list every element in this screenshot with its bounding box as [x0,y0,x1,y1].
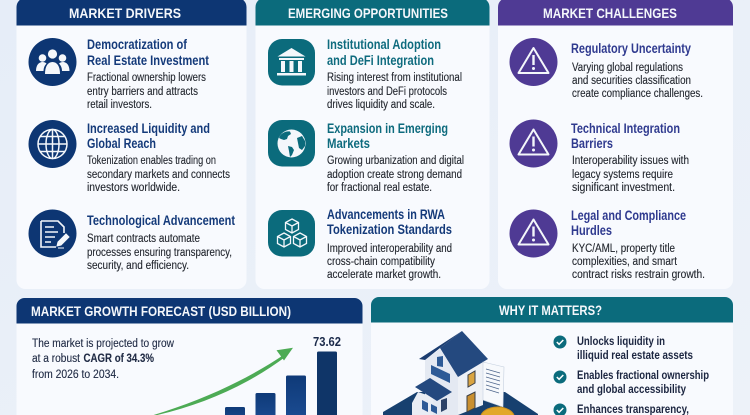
item: liquidity [87,121,230,194]
item: regulatory: create compliance challenges. [572,88,703,100]
check item 1: illiquid real estate assets [577,350,693,362]
panel: market challenges [498,0,733,289]
item: regulatory: and securities classification [572,75,691,87]
item: regulatory: Varying global regulations [572,62,683,74]
item: expansion: Growing urbanization and digital [327,155,464,167]
arrow: growth trend [152,348,293,415]
header: market growth forecast: MARKET GROWTH FORECAST (USD BILLION) [31,303,291,319]
header: market challenges: MARKET CHALLENGES [543,5,677,21]
panel: emerging opportunities [256,0,490,289]
item: rwa standards: accelerate market growth. [327,269,441,281]
item: technical: significant investment. [572,182,675,194]
bar chart [225,335,341,415]
item: expansion: for fractional real estate. [327,182,432,194]
text: cagr statement: at a robust [32,353,81,365]
item: technology: Technological Advancement [87,213,235,228]
check item 2 [554,370,709,396]
item: technical: Technical Integration [571,121,680,136]
check item 1: Unlocks liquidity in [577,336,665,348]
item: technology: Smart contracts automate [87,233,200,245]
header: market drivers: MARKET DRIVERS [69,5,181,21]
item: legal: complexities, and smart [572,256,678,268]
item: expansion: adoption create strong demand [327,169,462,181]
item: technical: Interoperability issues with [572,155,689,167]
item: liquidity: Global Reach [87,136,156,151]
item: technical: legacy systems require [572,169,673,181]
header: why it matters [371,297,733,322]
item: technology [87,213,235,272]
icon: institution [268,39,315,86]
item: legal [571,208,705,281]
check item 3 [554,404,689,415]
check item 2: and global accessibility [577,384,687,396]
item: democratization: Fractional ownership lowers [87,72,206,84]
item: technology: processes ensuring transparency, [87,247,232,259]
header: emerging opportunities: EMERGING OPPORTUNITIES [288,5,448,21]
item: democratization: Real Estate Investment [87,53,209,68]
icon: warning 2 [510,120,558,168]
item: legal: contract risks restrain growth. [572,269,705,281]
item: institutional adoption: drives liquidity and scale. [327,99,435,111]
item: technical [571,121,689,194]
item: legal: KYC/AML, property title [572,243,675,255]
bar chart: 73.62 [313,335,341,349]
item: institutional adoption: and DeFi Integration [327,53,434,68]
item: technology: security, and efficiency. [87,260,189,272]
illustration: tokenized house [383,331,538,415]
header: market growth forecast [16,298,362,324]
item: expansion [327,121,464,194]
item: rwa standards: Tokenization Standards [327,222,452,237]
panel: why it matters [371,297,733,415]
item: institutional adoption: investors and DeFi protocols [327,86,447,98]
item: rwa standards: cross-chain compatibility [327,256,435,268]
item: democratization: entry barriers and attracts [87,86,198,98]
item: democratization: retail investors. [87,99,152,111]
panel: market growth forecast [16,298,362,415]
item: expansion: Markets [327,136,370,151]
icon: cubes [268,210,315,256]
header: why it matters: WHY IT MATTERS? [499,302,602,318]
item: rwa standards: Improved interoperability and [327,243,452,255]
header: market challenges [498,0,733,26]
check item 2: Enables fractional ownership [577,370,709,382]
check item 1 [554,336,693,362]
panel: market drivers [16,0,246,289]
item: institutional adoption: Rising interest from institutional [327,72,462,84]
item: legal: Hurdles [571,223,612,238]
item: expansion: Expansion in Emerging [327,121,448,136]
icon: warning 1 [510,38,558,86]
item: democratization [87,37,209,111]
icon: warning 3 [510,210,558,258]
item: liquidity: Tokenization enables trading on [87,155,216,167]
item: institutional adoption [327,37,462,111]
item: liquidity: investors worldwide. [87,182,180,194]
text: cagr statement: from 2026 to 2034. [32,369,119,381]
item: regulatory [571,41,703,100]
item: institutional adoption: Institutional Adoption [327,37,441,52]
header: market drivers [16,0,246,26]
item: democratization: Democratization of [87,37,187,52]
item: regulatory: Regulatory Uncertainty [571,41,691,56]
item: technical: Barriers [571,136,613,151]
item: rwa standards [327,207,452,281]
item: legal: Legal and Compliance [571,208,686,223]
icon: earth [268,120,315,166]
icon: globe [28,120,76,168]
header: emerging opportunities [256,0,490,26]
icon: document with pen [28,210,76,258]
item: liquidity: secondary markets and connects [87,169,230,181]
icon: people [28,38,76,86]
item: rwa standards: Advancements in RWA [327,207,445,222]
text: cagr statement: The market is projected to grow [32,338,175,350]
item: liquidity: Increased Liquidity and [87,121,210,136]
text: cagr statement: CAGR of 34.3% [84,353,154,365]
